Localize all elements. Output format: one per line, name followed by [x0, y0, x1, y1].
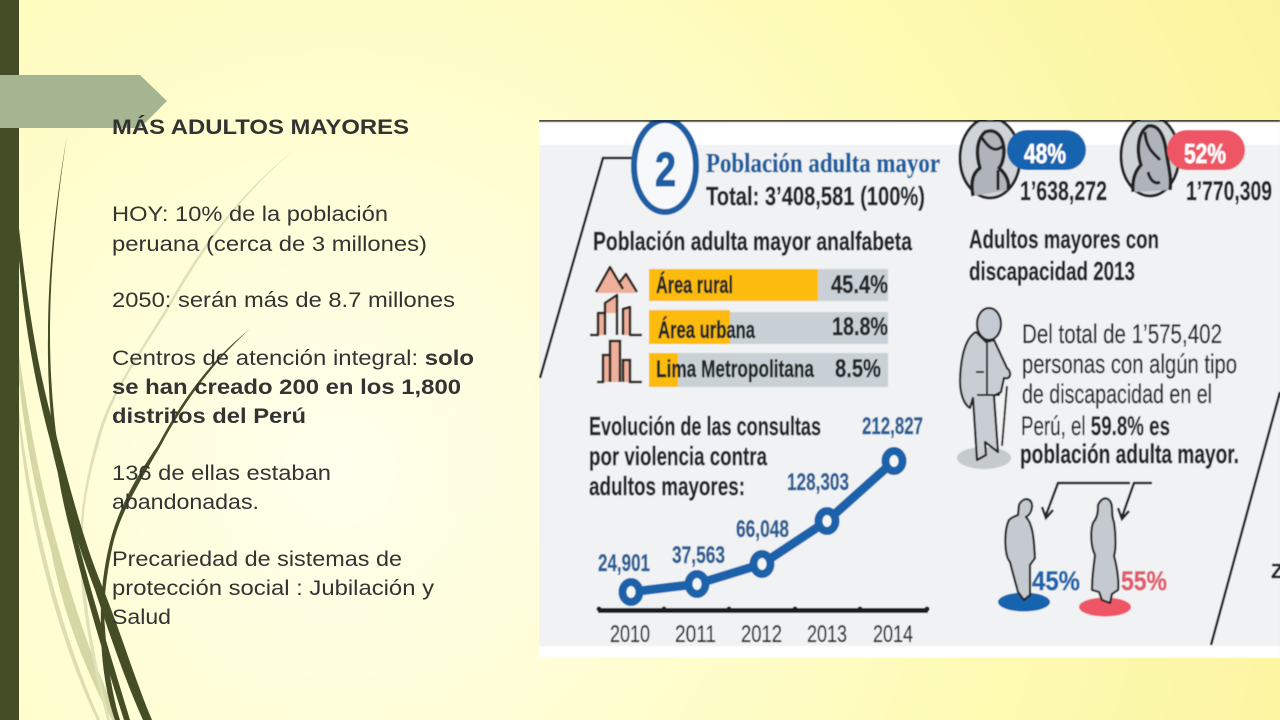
icon: man portrait with 48%: 1’638,272: [1020, 176, 1107, 206]
frame lines: [540, 158, 1280, 645]
text block: main points: Precariedad de sistemas de: [112, 547, 402, 571]
bar: urban 18.8%: Área urbana: [658, 316, 755, 344]
text block: disability statistic: [1020, 319, 1239, 469]
text block: main points: 2050: serán más de 8.7 millones: [112, 288, 455, 312]
icon: woman portrait with 52%: [1121, 116, 1272, 206]
heading: consultations: [589, 411, 821, 501]
line chart: consultations 2010-2014: 24,901: [598, 550, 650, 577]
heading: population total: [706, 148, 940, 211]
heading: disability: Adultos mayores con: [969, 224, 1159, 254]
text block: main points: Centros de atención integral: solo: [112, 346, 474, 370]
text block: main points: HOY: 10% de la población: [112, 202, 388, 226]
line chart: consultations 2010-2014: 2012: [741, 621, 782, 648]
bar: rural 45.4%: 45.4%: [831, 271, 888, 299]
heading: population total: Población adulta mayor: [706, 148, 940, 178]
badge: number 2: 2: [655, 144, 676, 197]
decorative grass blades: [19, 135, 297, 720]
figure: man 45%: 45%: [1032, 566, 1080, 596]
icon: urban buildings: [590, 295, 642, 335]
text block: disability statistic: Perú, el 59.8% es: [1021, 411, 1170, 441]
heading: population total: Total: 3’408,581 (100%): [706, 181, 925, 211]
panel: infographic image: [539, 116, 1280, 658]
heading: illiteracy: Población adulta mayor analfabeta: [593, 226, 912, 256]
icon: metropolitan buildings: [597, 341, 642, 382]
line chart: consultations 2010-2014: 2011: [675, 621, 716, 648]
left sidebar: [0, 0, 19, 720]
heading: consultations: adultos mayores:: [589, 471, 745, 501]
line chart: consultations 2010-2014: 212,827: [862, 413, 923, 440]
text block: main points: 136 de ellas estaban: [112, 461, 331, 485]
figure: woman 55%: 55%: [1121, 566, 1167, 596]
line chart: consultations 2010-2014: 2013: [807, 621, 847, 648]
text block: main points: Salud: [112, 605, 171, 629]
icon: mountains: [596, 267, 637, 293]
arrow banner: [0, 75, 167, 128]
text block: main points: se han creado 200 en los 1,800: [112, 375, 461, 399]
bar: rural 45.4%: [649, 269, 888, 301]
text block: disability statistic: Del total de 1’575,402: [1022, 319, 1222, 349]
top border line: [539, 120, 1280, 122]
text block: main points: distritos del Perú: [112, 404, 306, 428]
line chart: consultations 2010-2014: [596, 413, 930, 648]
text block: main points: peruana (cerca de 3 millones): [112, 232, 427, 256]
text block: main points: abandonadas.: [112, 490, 259, 514]
heading: disability: discapacidad 2013: [969, 256, 1135, 286]
line chart: consultations 2010-2014: 2014: [873, 621, 913, 648]
icon: man portrait with 48%: 48%: [1024, 138, 1066, 169]
arrows to figures: [1042, 483, 1152, 519]
figure: man 45%: [998, 499, 1080, 612]
text block: main points: [112, 202, 474, 629]
icon: man portrait with 48%: [960, 118, 1107, 206]
bar: Lima 8.5%: 8.5%: [835, 355, 881, 383]
figure: woman 55%: [1079, 498, 1167, 616]
heading: consultations: por violencia contra: [589, 441, 767, 471]
heading: disability: [969, 224, 1159, 286]
line chart: consultations 2010-2014: 66,048: [736, 516, 789, 543]
bar: rural 45.4%: Área rural: [656, 271, 733, 299]
bar: urban 18.8%: 18.8%: [832, 313, 888, 341]
text block: heading: MÁS ADULTOS MAYORES: [112, 114, 409, 139]
bar: Lima 8.5%: Lima Metropolitana: [656, 356, 814, 383]
text block: disability statistic: de discapacidad en el: [1022, 379, 1212, 409]
bar: urban 18.8%: [649, 310, 888, 344]
line chart: consultations 2010-2014: 37,563: [672, 542, 725, 569]
icon: woman portrait with 52%: 52%: [1184, 138, 1226, 169]
line chart: consultations 2010-2014: 128,303: [787, 469, 849, 496]
text block: main points: protección social : Jubilación y: [112, 576, 434, 600]
illustration: elderly man with cane: [957, 308, 1011, 469]
line chart: consultations 2010-2014: 2010: [610, 621, 650, 648]
heading: consultations: Evolución de las consultas: [589, 411, 821, 441]
badge: number 2: [634, 120, 696, 212]
